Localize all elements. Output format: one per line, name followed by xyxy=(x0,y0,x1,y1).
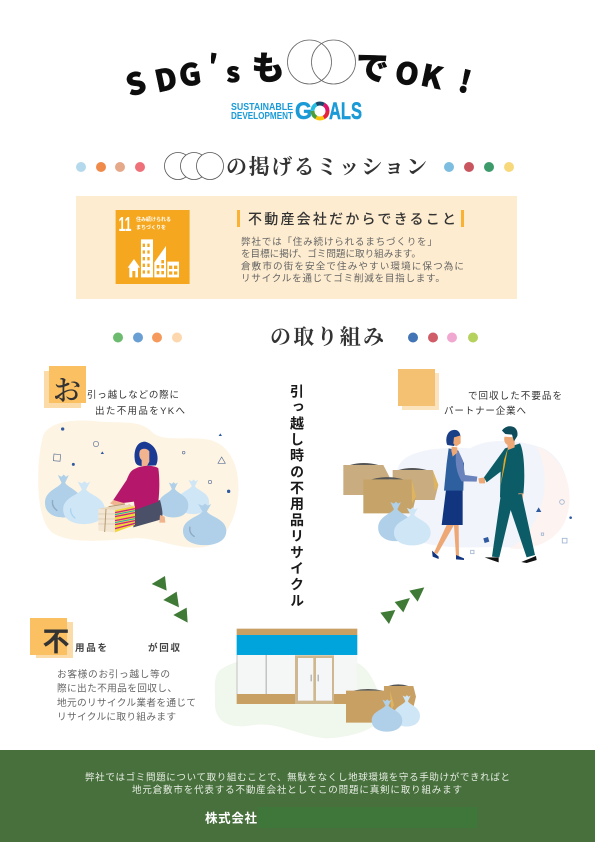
mission heading dots right xyxy=(444,162,514,172)
mission heading dots left xyxy=(76,162,145,172)
step 1 badge: お xyxy=(53,376,81,407)
step 1 text xyxy=(87,389,185,417)
step 3 text: 地元のリサイクル業者を通じて xyxy=(57,696,196,709)
icon: SDG 11: 住み続けられる xyxy=(136,216,171,223)
step 2 text xyxy=(444,391,562,417)
mission heading: の掲げるミッション xyxy=(226,155,427,179)
SDGs logo: SUSTAINABLE xyxy=(231,102,293,113)
SDGs logo: ALS xyxy=(329,98,362,125)
panel body text: リサイクルを通じてゴミ削減を目指します。 xyxy=(241,272,445,284)
step 3 text: お客様のお引っ越し等の xyxy=(57,668,170,680)
illustration: store xyxy=(215,629,420,738)
step 3 text: 際に出た不用品を回収し、 xyxy=(57,682,177,694)
SDGs logo: G xyxy=(295,98,312,125)
step 2 badge xyxy=(398,369,439,410)
title xyxy=(120,40,477,105)
step 3 badge: 不 xyxy=(42,627,70,657)
footer message xyxy=(85,772,510,796)
boxes xyxy=(343,463,438,513)
panel body text: 弊社では「住み続けられるまちづくりを」 xyxy=(241,236,437,248)
woman figure xyxy=(110,442,165,527)
footer message: 地元倉敷市を代表する不動産会社としてこの問題に真剣に取り組みます xyxy=(132,784,462,796)
illustration: handshake with boxes xyxy=(343,426,572,563)
footer xyxy=(0,750,595,842)
SDGs logo: DEVELOPMENT xyxy=(231,111,293,122)
company name: 株式会社 xyxy=(205,810,257,826)
step 1 text: 引っ越しなどの際に xyxy=(87,389,179,401)
icon: SDG 11: まちづくりを xyxy=(136,224,166,231)
title: s xyxy=(225,51,241,90)
panel body text: を目標に掲げ、ゴミ問題に取り組みます。 xyxy=(241,248,421,260)
man in suit xyxy=(478,426,537,563)
step 3 heading: が回収 xyxy=(148,642,180,654)
step 3 text: リサイクルに取り組みます xyxy=(57,710,176,723)
title: D xyxy=(150,54,181,101)
step 3 heading xyxy=(75,642,180,654)
icon: SDG 11: 11 xyxy=(118,214,132,236)
section heading: の取り組み xyxy=(270,325,384,349)
step 3 text xyxy=(57,668,196,723)
panel heading: 不動産会社だからできること xyxy=(248,211,456,227)
woman in suit xyxy=(432,430,477,560)
step 3 badge xyxy=(30,618,73,658)
title: で xyxy=(353,40,391,91)
illustration: woman with bags xyxy=(38,420,238,548)
SDGs logo xyxy=(231,98,362,125)
step 3 heading: 用品を xyxy=(75,643,107,654)
mission heading xyxy=(164,152,427,180)
step 1 badge xyxy=(44,366,86,408)
section heading dots left xyxy=(113,332,182,342)
footer message: 弊社ではゴミ問題について取り組むことで、無駄をなくし地球環境を守る手助けができればと xyxy=(85,772,510,784)
title: ! xyxy=(454,57,477,102)
icon: SDG 11 xyxy=(116,210,190,284)
boxes and bags xyxy=(346,684,420,732)
title masked circles xyxy=(288,40,356,84)
step 2 text: パートナー企業へ xyxy=(444,405,526,417)
step 1 text: 出た不用品をYKへ xyxy=(95,405,185,417)
title: O xyxy=(392,48,423,95)
title: K xyxy=(418,51,448,98)
section heading dots right xyxy=(408,332,478,342)
arrow: triangles left xyxy=(152,576,188,623)
title: G xyxy=(176,49,204,96)
arrow: triangles right xyxy=(380,587,424,624)
panel body text xyxy=(241,236,464,284)
title: S xyxy=(120,58,151,105)
company name xyxy=(205,807,477,828)
panel: mission xyxy=(76,196,517,299)
panel body text: 倉敷市の街を安全で住みやすい環境に保つ為に xyxy=(241,260,464,272)
books xyxy=(98,504,135,532)
vertical heading: 引っ越し時の不用品リサイクル xyxy=(287,384,307,609)
title: も xyxy=(251,41,285,90)
step 2 text: で回収した不要品を xyxy=(468,391,562,402)
title: ' xyxy=(205,47,219,84)
